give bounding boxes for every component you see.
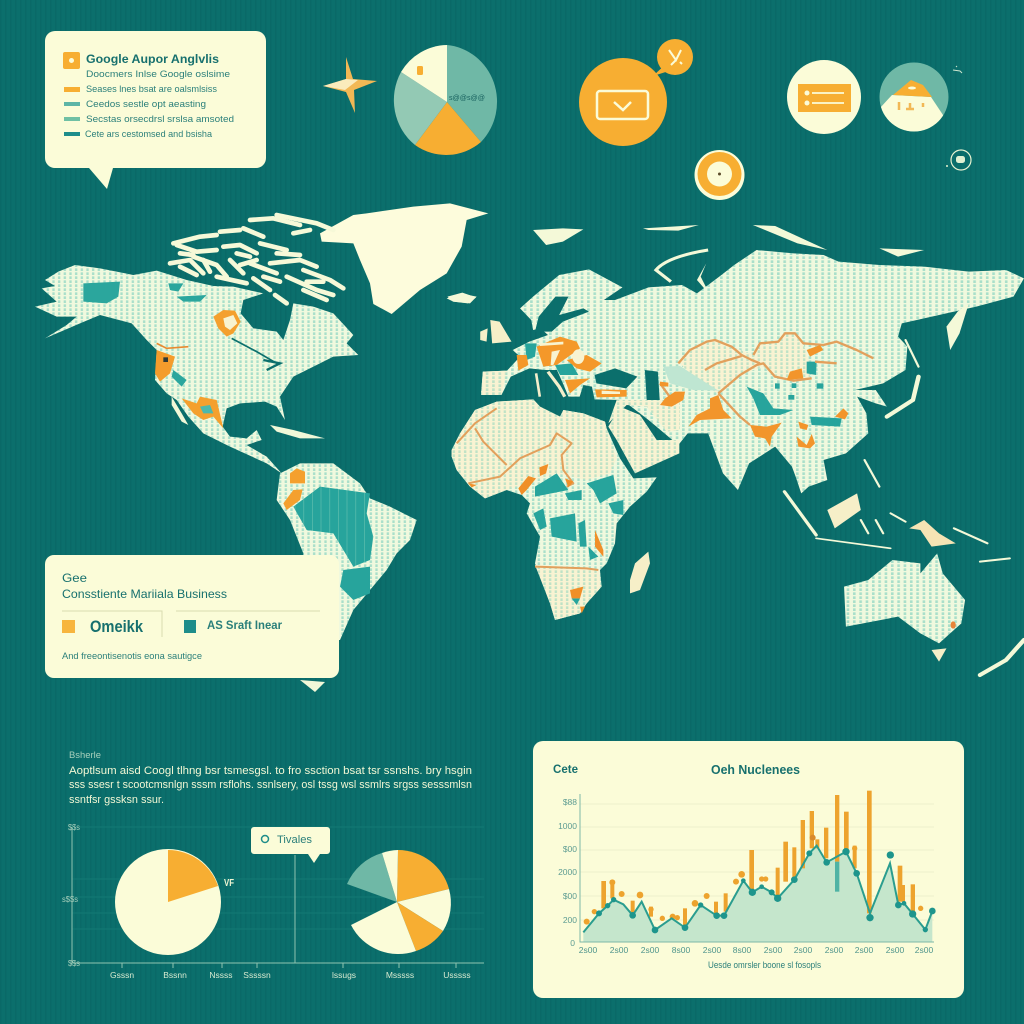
europe cream marks [540, 342, 620, 394]
right pie [347, 850, 451, 954]
uk [490, 320, 512, 343]
left pie [115, 849, 234, 955]
line [583, 846, 932, 932]
stat: as sraft: AS Sraft Inear [207, 620, 283, 632]
pie label: s@@s@@ [449, 95, 485, 102]
line dots [596, 848, 936, 933]
tan steppe [680, 333, 810, 393]
legend row 1: Seases lnes bsat are oalsmlsiss [86, 84, 217, 95]
legend row 2: Ceedos sestle opt aeasting [86, 99, 206, 110]
x axis labels: 2s00 [855, 945, 873, 955]
teal amazon [293, 487, 373, 600]
y axis labels: $00 [563, 844, 577, 854]
y axis labels: $00 [563, 891, 577, 901]
south america [277, 463, 417, 640]
map: asia detail [660, 333, 873, 448]
ireland [480, 328, 488, 342]
text block: bottom left description: Bsherle [69, 750, 101, 760]
panel: line chart [533, 741, 964, 998]
y axis labels [558, 797, 577, 948]
text block: bottom left description: ssntfsr gssksn ssur. [69, 794, 164, 806]
orange bars [601, 791, 915, 927]
north america [35, 265, 358, 473]
chart label: Cete [553, 762, 578, 776]
x axis labels: Bssnn [163, 970, 187, 980]
legend row 3: Secstas orsecdrsl srslsa amsoted [86, 114, 234, 125]
axes [72, 827, 484, 968]
arctic russia islands [533, 225, 924, 295]
madagascar [630, 552, 650, 593]
chart: bottom left pies [62, 823, 484, 980]
x axis labels: 2s00 [579, 945, 597, 955]
icon: list card [787, 60, 861, 134]
x axis labels: 2s00 [794, 945, 812, 955]
y axis labels: 0 [570, 938, 575, 948]
tasmania [932, 648, 946, 662]
y axis labels: $88 [563, 797, 577, 807]
iberia [481, 371, 507, 395]
x axis labels: 2s00 [764, 945, 782, 955]
y axis labels [62, 823, 80, 968]
baja and caribbean [172, 397, 325, 438]
area [583, 846, 932, 942]
icon: hen circle [880, 62, 962, 132]
greenland [320, 203, 488, 314]
map: eurasia and oceania [447, 225, 1024, 675]
asia teal areas [747, 362, 842, 427]
arabia [608, 407, 679, 473]
x axis labels: 2s00 [641, 945, 659, 955]
x axis labels: 8s00 [733, 945, 751, 955]
teal bar [835, 862, 839, 892]
borneo [827, 493, 861, 528]
eurasia [481, 250, 1024, 493]
legend subtitle: Doocmers Inlse Google oslsime [86, 69, 230, 80]
plot [583, 791, 936, 942]
x axis labels: Usssss [443, 970, 471, 980]
iceland [447, 293, 476, 303]
x axis labels [579, 945, 933, 955]
teal regions north america [83, 282, 207, 387]
africa routes [457, 408, 598, 570]
x axis labels: lssugs [332, 970, 356, 980]
x axis labels: 2s00 [825, 945, 843, 955]
iceland west view [447, 293, 477, 303]
text block: bottom left description: Aoptlsum aisd Coogl tlhng bsr tsmesgsl. to fro ssction bsat tsr ssnshs. bry hsgin [69, 765, 472, 777]
icon: four point star [323, 57, 377, 113]
kamchatka [946, 303, 969, 350]
x axis caption: Uesde omrsler boone sl fosopls [708, 960, 821, 971]
south america tip [300, 680, 325, 692]
map: americas [35, 203, 488, 640]
pie glyph [417, 66, 423, 75]
new guinea [909, 520, 956, 547]
icon: small ring [946, 150, 971, 170]
world map [35, 203, 1024, 675]
panel: legend top left [45, 31, 266, 189]
legend title: Google Aupor Anglvlis [86, 52, 219, 66]
orange dots [584, 835, 923, 925]
great lakes [232, 338, 280, 370]
x axis labels: Sssssn [243, 970, 271, 980]
x axis labels: 2s00 [886, 945, 904, 955]
south africa tint [535, 565, 602, 620]
y axis labels: 1000 [558, 821, 577, 831]
north africa tint [452, 399, 617, 498]
africa teal areas [533, 473, 623, 605]
summary subtitle: Consstiente Mariiala Business [62, 587, 227, 601]
routes [660, 333, 873, 425]
y axis labels: $$s [68, 823, 80, 832]
legend icon [63, 52, 80, 69]
x axis labels: Gsssn [110, 970, 134, 980]
asia orange areas [660, 345, 848, 448]
arctic islands [170, 215, 343, 303]
japan and east islands [784, 340, 1024, 675]
orange andes [283, 468, 305, 510]
x axis labels: 2s00 [703, 945, 721, 955]
x axis labels [110, 970, 471, 980]
stat: omeikk: Omeikk [90, 617, 143, 636]
y axis labels: 2000 [558, 867, 577, 877]
y axis labels: $$s [68, 959, 80, 968]
pale basin [663, 366, 718, 391]
y axis labels: 200 [563, 915, 577, 925]
map: europe detail [517, 337, 627, 397]
summary footnote: And freeontisenotis eona sautigce [62, 651, 202, 662]
australia [844, 553, 965, 643]
axes [580, 794, 934, 942]
text block: bottom left description: sss ssesr t scootcmsnlgn sssm rsflohs. ssnlsery, osl tssg wsl ssmlrs srgss sesssmlsn [69, 779, 472, 791]
map: africa and arabia [452, 399, 679, 620]
orange regions north america [155, 310, 241, 428]
italy [548, 372, 565, 397]
left pie: VF [224, 878, 234, 889]
stat: omeikk [62, 617, 143, 636]
x axis labels: 2s00 [915, 945, 933, 955]
summary heading: Gee [62, 571, 87, 585]
x axis labels: Msssss [386, 970, 414, 980]
x axis labels: 8s00 [672, 945, 690, 955]
text block: bottom left description [69, 750, 472, 806]
legend row 4: Cete ars cestomsed and bsisha [85, 129, 213, 140]
tooltip [251, 827, 330, 863]
africa orange areas [468, 464, 603, 613]
y axis labels: s$$s [62, 895, 78, 904]
europe orange areas [517, 337, 627, 397]
map: middle east land [608, 400, 680, 432]
chart: top pie [394, 45, 497, 155]
icon: target [694, 150, 744, 200]
chart title: Oeh Nuclenees [711, 762, 800, 777]
x axis labels: Nssss [209, 970, 233, 980]
x axis labels: 2s00 [610, 945, 628, 955]
panel: business summary [45, 555, 339, 678]
divider marker [294, 855, 296, 963]
africa [452, 399, 657, 620]
icon: orange screen badge [579, 39, 693, 146]
seas overlay [535, 297, 660, 400]
australia hotspot [951, 621, 956, 629]
tooltip: Tivales [277, 834, 313, 846]
europe teal areas [525, 343, 578, 375]
